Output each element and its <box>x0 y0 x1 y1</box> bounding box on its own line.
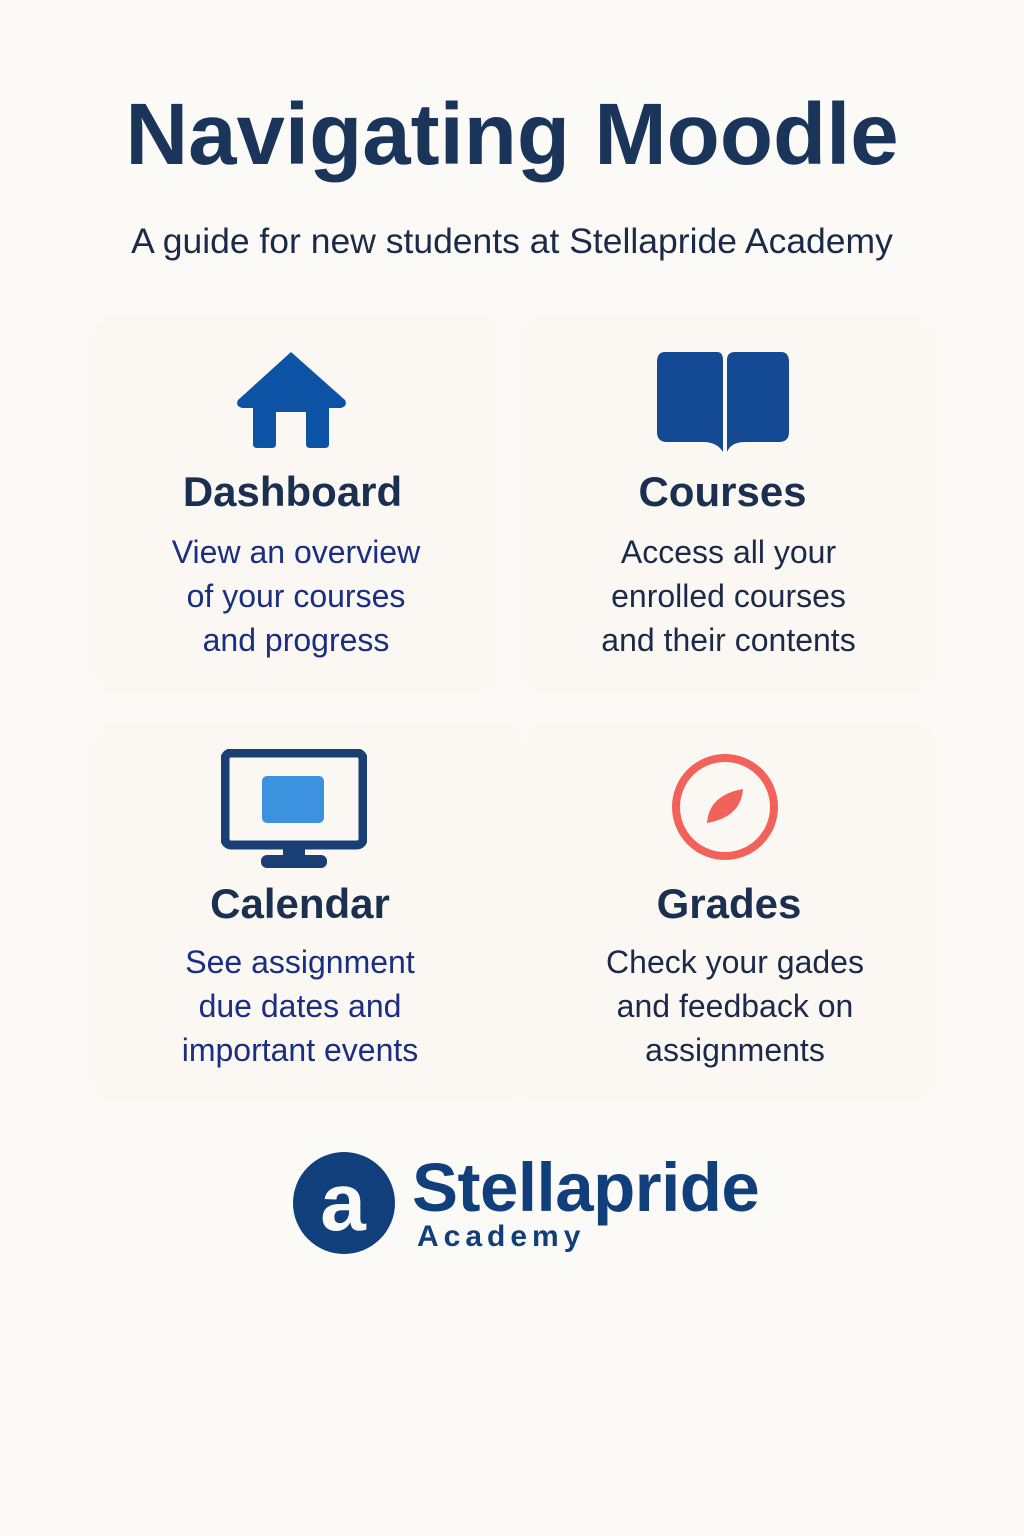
icon: logo circle: a <box>320 1157 367 1248</box>
text: grades description: assignments <box>645 1032 825 1068</box>
text: grades description: Check your gades <box>606 944 864 980</box>
text: courses description: enrolled courses <box>611 578 846 614</box>
icon: book <box>657 352 789 452</box>
text: grades description <box>606 944 864 1068</box>
heading: Calendar: Calendar <box>210 880 390 927</box>
text: dashboard description: and progress <box>203 622 389 658</box>
icon: logo circle <box>293 1152 395 1254</box>
panel: calendar <box>95 725 520 1100</box>
text: calendar description: See assignment <box>185 944 415 980</box>
heading: Courses: Courses <box>638 468 807 515</box>
text: courses description: and their contents <box>601 622 856 658</box>
logo <box>293 1149 759 1254</box>
heading: Dashboard: Dashboard <box>183 468 402 515</box>
text: grades description: and feedback on <box>617 988 853 1024</box>
text: Academy: Academy <box>417 1220 585 1253</box>
icon: monitor <box>221 749 367 868</box>
text: courses description <box>601 534 856 658</box>
title: Navigating Moodle <box>125 86 899 183</box>
text: dashboard description <box>172 534 420 658</box>
text: courses description: Access all your <box>621 534 836 570</box>
icon: house <box>237 352 346 448</box>
text: Stellapride: Stellapride <box>412 1149 759 1226</box>
icon: compass <box>672 754 778 860</box>
text: dashboard description: of your courses <box>187 578 405 614</box>
text: calendar description: due dates and <box>199 988 401 1024</box>
panel: grades <box>525 725 930 1100</box>
text: dashboard description: View an overview <box>172 534 420 570</box>
subtitle: A guide for new students at Stellapride Academy <box>131 221 893 261</box>
panel: dashboard <box>95 318 495 690</box>
text: calendar description: important events <box>182 1032 418 1068</box>
text: calendar description <box>182 944 418 1068</box>
panel: courses <box>525 318 930 690</box>
heading: Grades: Grades <box>657 880 801 927</box>
